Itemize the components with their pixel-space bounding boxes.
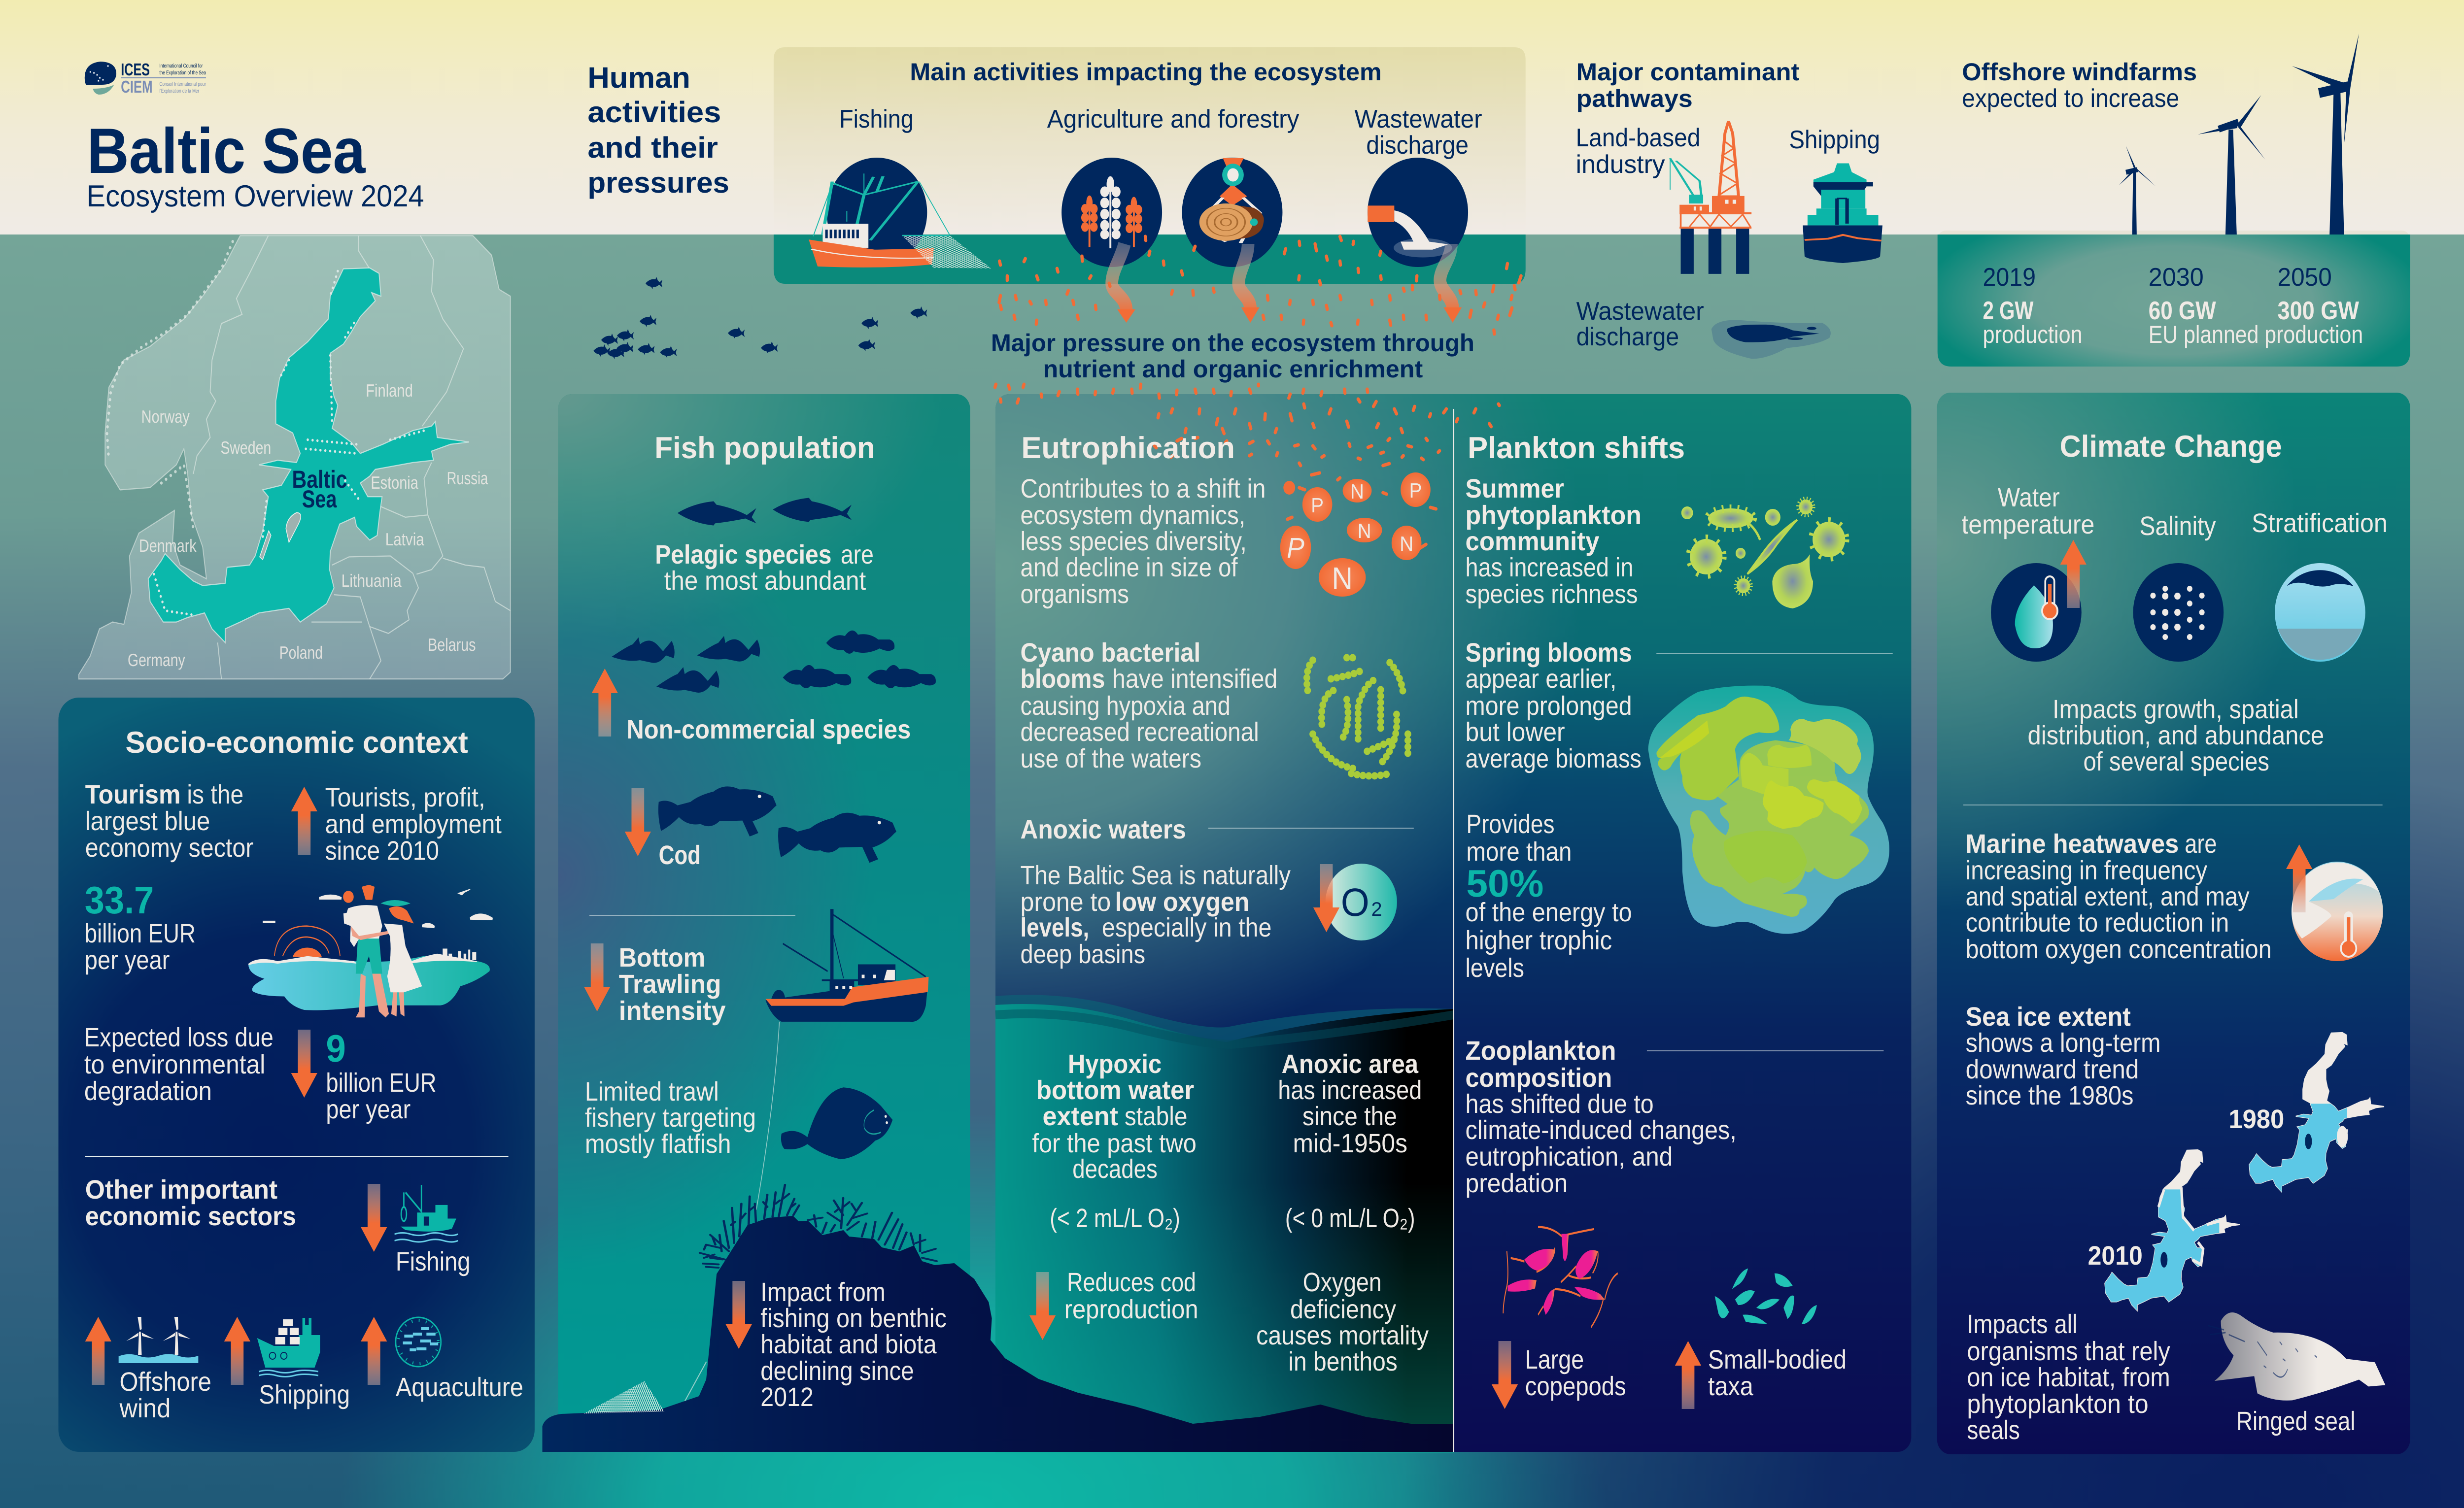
icon: water temperature: [1991, 540, 2087, 662]
panel: main activities impacting the ecosystem: [774, 47, 1526, 284]
text: low oxygen levels: especially in the: [1102, 913, 1271, 942]
heading: Fish population: [654, 431, 875, 465]
ICES CIEM logo: CIEM: [121, 77, 153, 97]
label: non-commercial species: Non-commercial species: [626, 715, 911, 744]
text: tourists increase: since 2010: [325, 836, 439, 866]
text: spring blooms: but lower: [1466, 717, 1565, 747]
text: bottom trawling intensity: [619, 943, 726, 1026]
text: marine heatwaves: and spatial extent, and may: [1966, 882, 2250, 911]
text: reduces cod reproduction: Reduces cod: [1067, 1268, 1196, 1297]
icon: cyanobacteria chains: [1307, 658, 1408, 776]
text: impact from fishing on benthic habitat: fishing on benthic: [760, 1304, 947, 1333]
map of the Baltic region: Finland: [366, 380, 413, 401]
label: cod: Cod: [659, 840, 701, 870]
years: 2030: [2149, 263, 2204, 292]
text: spring blooms: [1466, 638, 1642, 773]
production notes: EU planned production: [2149, 321, 2363, 348]
arrow down: [291, 1030, 317, 1098]
text: low oxygen levels: levels,: [1021, 913, 1089, 942]
text: cyanobacterial blooms: [1021, 638, 1277, 773]
map: sea ice 2010: [2105, 1150, 2240, 1310]
text: hypoxic bottom water: extent: [1043, 1102, 1118, 1131]
number: 33.7 billion EUR: [85, 878, 196, 975]
arrow down fishing: [361, 1184, 387, 1252]
label: shipping: Shipping: [259, 1380, 350, 1409]
text: zooplankton composition: Zooplankton: [1466, 1036, 1616, 1066]
map of the Baltic region: Norway: [141, 406, 190, 427]
icon: pelagic fish: [678, 498, 852, 526]
arrow down cod reproduction: [1029, 1272, 1056, 1340]
heading: offshore windfarms: Offshore windfarms: [1962, 58, 2197, 86]
icon: phytoplankton: [1681, 500, 1845, 608]
label: stratification: Stratification: [2252, 508, 2388, 538]
text: limited trawl fishery: [585, 1077, 756, 1159]
ICES CIEM logo: l'Exploration de la Mer: [159, 88, 199, 94]
title: Baltic Sea: [87, 115, 366, 187]
heading: human activities and their pressures: and their: [587, 131, 718, 164]
heading: Climate Change: [2060, 430, 2282, 464]
label: ringed seal: Ringed seal: [2236, 1407, 2356, 1436]
heading: human activities and their pressures: activities: [587, 96, 721, 129]
years: 2019: [1983, 263, 2036, 292]
text: oxygen deficiency: in benthos: [1288, 1347, 1398, 1376]
heading: human activities and their pressures: [587, 61, 729, 199]
icon: flatfish: [781, 1087, 892, 1159]
arrow up shipping: [224, 1317, 250, 1385]
map of the Baltic region: Denmark: [139, 536, 197, 556]
arrow down benthic: [726, 1281, 752, 1349]
text: tourism: largest blue: [85, 806, 210, 836]
text: summer phytoplankton: species richness: [1466, 579, 1638, 609]
text: marine heatwaves: [1966, 829, 2272, 964]
text: oxygen deficiency: deficiency: [1290, 1295, 1396, 1324]
heading: major pressure on the ecosystem: Major pressure on the ecosystem through: [991, 329, 1474, 357]
text: impacts all organisms: seals: [1967, 1415, 2020, 1445]
text: eutrophication effects: less species diversity,: [1021, 527, 1247, 556]
map of the Baltic region: Poland: [279, 642, 323, 663]
text: marine heatwaves: contribute to reduction in: [1966, 908, 2229, 938]
text: bottom trawling intensity: Bottom: [619, 943, 705, 972]
text: low oxygen levels: deep basins: [1021, 939, 1145, 969]
text: sea ice extent: since the 1980s: [1966, 1081, 2133, 1110]
title: Ecosystem Overview 2024: [86, 179, 424, 213]
text: marine heatwaves: Marine heatwaves: [1966, 829, 2179, 859]
map of the Baltic region: Lithuania: [342, 570, 402, 591]
icon: fishing circle and trawler: [809, 158, 991, 268]
text: anoxic area: [1278, 1049, 1422, 1233]
label: water temperature: [1961, 483, 2094, 539]
text: sea ice extent: [1966, 1002, 2161, 1110]
section: eutrophication: [1021, 431, 1431, 1376]
production notes: production: [1983, 321, 2083, 348]
map of the Baltic region: Estonia: [371, 472, 419, 493]
text: 50 percent energy: levels: [1466, 953, 1524, 983]
icon: oxygen O2: 2: [1371, 899, 1382, 920]
label: salinity: Salinity: [2139, 511, 2216, 541]
heading: major contaminant pathways: Major contaminant: [1576, 58, 1800, 86]
text: expected loss: to environmental: [84, 1050, 265, 1079]
text: impacts growth: of several species: [2083, 747, 2269, 776]
label: aquaculture: Aquaculture: [396, 1373, 523, 1402]
arrows: nutrient flows from activities to the sea: [1112, 244, 1462, 323]
icon: cod: [658, 786, 896, 863]
text: 50 percent energy: of the energy to: [1466, 898, 1632, 927]
arrow up aquaculture: [361, 1317, 387, 1385]
label: wastewater discharge: [1354, 105, 1482, 160]
text: hypoxic bottom water: Hypoxic: [1068, 1049, 1162, 1079]
number: 33.7 billion EUR: per year: [85, 945, 170, 975]
label: wastewater discharge: discharge: [1366, 131, 1469, 160]
label: agriculture and forestry: Agriculture and forestry: [1047, 105, 1299, 134]
gigawatts: [1983, 297, 2360, 325]
gigawatts: 300 GW: [2278, 297, 2360, 325]
label: fishing: Fishing: [839, 105, 914, 134]
number: 33.7 billion EUR: billion EUR: [85, 919, 196, 948]
label: offshore wind: [119, 1367, 211, 1423]
icon: oxygen O2: [1313, 864, 1397, 940]
heading: human activities and their pressures: pressures: [587, 166, 729, 199]
text: hypoxic bottom water: for the past two: [1032, 1129, 1197, 1158]
text: impacts all organisms: on ice habitat, from: [1967, 1363, 2170, 1392]
map of the Baltic region: Belarus: [428, 635, 476, 655]
heading: human activities and their pressures: Human: [587, 61, 690, 94]
orange nutrient particles: [995, 236, 1521, 553]
text: hypoxic bottom water: [1032, 1049, 1197, 1233]
section: plankton shifts: [1466, 431, 1893, 1409]
heading: offshore windfarms: [1962, 58, 2197, 113]
label: wastewater discharge pathway: [1576, 297, 1704, 351]
text: hypoxic bottom water: stable: [1125, 1102, 1188, 1131]
illustration: ringed seal: [2208, 1312, 2385, 1401]
number: 33.7 billion EUR: 33.7: [85, 878, 154, 922]
text: impacts growth: Impacts growth, spatial: [2053, 695, 2299, 724]
panel: socio-economic context: [59, 698, 535, 1452]
text: spring blooms: appear earlier,: [1466, 664, 1616, 694]
text: 50 percent energy: more than: [1466, 837, 1572, 867]
production notes: [1983, 321, 2363, 348]
icon: cargo ship: [257, 1318, 320, 1376]
label: small-bodied taxa: [1708, 1345, 1847, 1401]
map of the Baltic region: Russia: [447, 468, 488, 488]
number: 9 billion EUR: 9: [326, 1027, 346, 1070]
text: zooplankton composition: eutrophication, and: [1466, 1142, 1673, 1172]
text: summer phytoplankton: Summer: [1466, 474, 1564, 503]
icon: oil rig: [1670, 121, 1751, 274]
label: large copepods: copepods: [1525, 1372, 1626, 1401]
title: [86, 115, 424, 213]
text: anoxic area: since the: [1302, 1102, 1397, 1131]
map of the Baltic region: Germany: [128, 650, 185, 670]
heading: main activities: Main activities impacting the ecosystem: [910, 58, 1382, 86]
ICES CIEM logo: [85, 60, 206, 97]
number: 9 billion EUR: [326, 1027, 437, 1124]
icon: forestry log: [1182, 158, 1282, 267]
arrow up: [291, 787, 317, 855]
ICES CIEM logo: the Exploration of the Sea: [159, 70, 206, 76]
text: eutrophication effects: [1021, 474, 1266, 609]
text: reduces cod reproduction: [1064, 1268, 1198, 1324]
text: impacts growth: [2027, 695, 2324, 776]
label: wastewater discharge pathway: Wastewater: [1576, 297, 1704, 326]
label: 1980: 1980: [2228, 1105, 2284, 1134]
text: zooplankton composition: [1466, 1036, 1737, 1198]
arrow down cod: [625, 788, 651, 856]
text: cyanobacterial blooms: Cyano bacterial: [1021, 638, 1200, 668]
text: cyanobacterial blooms: use of the waters: [1021, 744, 1201, 773]
text: impact from fishing on benthic habitat: [760, 1277, 947, 1412]
text: impacts growth: distribution, and abundance: [2027, 721, 2324, 750]
text: marine heatwaves: are: [2185, 829, 2217, 859]
text: oxygen deficiency: [1256, 1268, 1429, 1376]
panel: eutrophication and plankton shifts: [995, 394, 1911, 1453]
map of the Baltic region: Sweden: [220, 437, 271, 458]
text: pelagic species: Pelagic species: [655, 540, 831, 570]
text: tourism: [85, 780, 253, 863]
text: 50 percent energy: Provides: [1466, 809, 1555, 839]
label: fishing: Fishing: [396, 1247, 470, 1276]
label: small-bodied taxa: taxa: [1708, 1372, 1754, 1401]
label: wastewater discharge pathway: discharge: [1576, 323, 1679, 351]
text: tourism: Tourism: [85, 780, 181, 809]
icon: offshore wind turbines: [119, 1317, 198, 1363]
ICES CIEM logo: Conseil International pour: [159, 81, 206, 87]
heading: major contaminant pathways: pathways: [1576, 85, 1693, 112]
text: eutrophication effects: ecosystem dynamics,: [1021, 501, 1245, 530]
text: eutrophication effects: and decline in size of: [1021, 553, 1238, 582]
ICES CIEM logo: ICES: [121, 60, 150, 79]
text: sea ice extent: shows a long-term: [1966, 1028, 2161, 1058]
years: [1983, 263, 2332, 292]
map of the Baltic region: Latvia: [385, 529, 425, 549]
icon: nutrient bubbles P and N: N: [1350, 480, 1364, 503]
icon: nutrient bubbles P and N: [1280, 472, 1431, 597]
gigawatts: 2 GW: [1983, 297, 2034, 325]
text: anoxic area: has increased: [1278, 1075, 1422, 1105]
arrow up small-bodied taxa: [1675, 1341, 1701, 1409]
text: low oxygen levels: prone to: [1021, 887, 1111, 917]
text: impact from fishing on benthic habitat: 2012: [760, 1382, 814, 1412]
text: oxygen deficiency: causes mortality: [1256, 1321, 1429, 1350]
text: tourists increase: and employment: [325, 809, 502, 839]
text: tourists increase: [325, 783, 502, 866]
icon: cargo ship: [1803, 164, 1882, 263]
text: zooplankton composition: has shifted due to: [1466, 1089, 1654, 1119]
text: reduces cod reproduction: reproduction: [1064, 1295, 1198, 1324]
text: bottom trawling intensity: intensity: [619, 996, 726, 1026]
icon: large copepods: [1503, 1227, 1618, 1327]
text: spring blooms: more prolonged: [1466, 691, 1632, 721]
panel: offshore wind production: [1938, 231, 2410, 367]
gigawatts: 60 GW: [2149, 297, 2216, 325]
text: limited trawl fishery: Limited trawl: [585, 1077, 719, 1106]
label: shipping: Shipping: [1789, 126, 1880, 154]
text: impacts all organisms: [1967, 1309, 2170, 1445]
seabed with corals and net: [542, 1185, 1454, 1452]
text: other important economic sectors: Other important: [85, 1175, 277, 1205]
label: offshore wind: Offshore: [120, 1367, 211, 1397]
panel: climate change: [1937, 393, 2410, 1454]
text: summer phytoplankton: phytoplankton: [1466, 501, 1642, 530]
text: low oxygen levels: The Baltic Sea is naturally: [1021, 861, 1291, 890]
text: zooplankton composition: climate-induced changes,: [1466, 1115, 1737, 1145]
text: impact from fishing on benthic habitat: Impact from: [760, 1277, 886, 1307]
icon: nutrient bubbles P and N: N: [1400, 532, 1413, 555]
text: impact from fishing on benthic habitat: habitat and biota: [760, 1330, 937, 1359]
text: impact from fishing on benthic habitat: declining since: [760, 1356, 914, 1386]
deep anoxic water layers: [995, 995, 1454, 1453]
icon: fishing boat: [395, 1185, 458, 1242]
text: low oxygen levels: [1021, 861, 1291, 969]
years: 2050: [2278, 263, 2332, 292]
text: limited trawl fishery: fishery targeting: [585, 1103, 756, 1133]
text: bottom trawling intensity: Trawling: [619, 970, 721, 999]
icon: agriculture wheat: [1061, 158, 1162, 267]
text: zooplankton composition: predation: [1466, 1169, 1568, 1198]
text: 50 percent energy: 50%: [1466, 862, 1543, 905]
map of the Baltic region: [79, 235, 511, 679]
text: summer phytoplankton: [1466, 474, 1642, 609]
text: zooplankton composition: composition: [1466, 1063, 1612, 1093]
heading: major pressure on the ecosystem: nutrient and organic enrichment: [1043, 355, 1423, 383]
text: impacts all organisms: phytoplankton to: [1967, 1389, 2149, 1419]
illustration: family on beach: [248, 885, 492, 1017]
label: small-bodied taxa: Small-bodied: [1708, 1345, 1847, 1374]
text: spring blooms: Spring blooms: [1466, 638, 1632, 668]
icon: aquaculture: [396, 1317, 441, 1367]
label: large copepods: Large: [1525, 1345, 1584, 1374]
label: water temperature: Water: [1998, 483, 2060, 512]
text: impacts all organisms: organisms that rely: [1967, 1337, 2170, 1366]
icon: wastewater pipe: [1368, 158, 1468, 267]
text: hypoxic bottom water: (< 2 mL/L O₂): [1050, 1204, 1180, 1233]
text: low oxygen levels: low oxygen: [1115, 887, 1249, 917]
text: cyanobacterial blooms: blooms: [1021, 664, 1105, 694]
arrow down copepods: [1492, 1341, 1518, 1409]
label: wastewater discharge: Wastewater: [1354, 105, 1482, 134]
text: other important economic sectors: [85, 1175, 296, 1231]
ICES CIEM logo: International Council for: [159, 63, 203, 69]
text: limited trawl fishery: mostly flatfish: [585, 1129, 731, 1159]
heading: Eutrophication: [1021, 431, 1235, 465]
label: large copepods: [1525, 1345, 1626, 1401]
arrow down trawling: [584, 943, 610, 1011]
icon: non-commercial fish: [612, 631, 936, 693]
text: tourism: is the: [187, 780, 243, 809]
heading: major pressure on the ecosystem: [991, 329, 1474, 383]
arrow up offshore wind: [85, 1317, 111, 1385]
text: anoxic area: (< 0 mL/L O₂): [1285, 1204, 1415, 1233]
text: cyanobacterial blooms: have intensified: [1112, 664, 1277, 694]
number: 9 billion EUR: per year: [326, 1095, 411, 1124]
icon: nutrient bubbles P and N: P: [1409, 479, 1422, 502]
label: land-based industry: industry: [1576, 150, 1665, 179]
map: sea ice 1980: [2249, 1033, 2384, 1192]
icon: heatwave: [2286, 844, 2383, 961]
text: pelagic species: are: [841, 540, 874, 570]
text: expected loss: [84, 1023, 274, 1106]
icon: trawler boat: [682, 909, 928, 1407]
label: water temperature: temperature: [1961, 510, 2094, 539]
label: offshore wind: wind: [119, 1394, 171, 1423]
text: other important economic sectors: economic sectors: [85, 1202, 296, 1231]
text: sea ice extent: downward trend: [1966, 1055, 2139, 1084]
icon: nutrient bubbles P and N: P: [1311, 494, 1324, 517]
icon: nutrient bubbles P and N: N: [1358, 519, 1371, 542]
heading: offshore windfarms: expected to increase: [1962, 84, 2179, 113]
map of the Baltic region: Sea: [302, 485, 337, 513]
text: summer phytoplankton: has increased in: [1466, 553, 1633, 582]
text: tourists increase: Tourists, profit,: [325, 783, 485, 812]
text: tourism: economy sector: [85, 833, 253, 863]
number: 9 billion EUR: billion EUR: [326, 1068, 437, 1098]
icon: oil spill: [1711, 320, 1831, 359]
text: hypoxic bottom water: decades: [1072, 1154, 1158, 1184]
text: marine heatwaves: bottom oxygen concentration: [1966, 935, 2272, 964]
heading: Socio-economic context: [125, 726, 468, 760]
heading: major contaminant pathways: [1576, 58, 1800, 112]
label: land-based industry: Land-based: [1576, 124, 1700, 152]
text: anoxic area: Anoxic area: [1282, 1049, 1419, 1079]
text: hypoxic bottom water: bottom water: [1036, 1075, 1194, 1105]
text: cyanobacterial blooms: causing hypoxia and: [1021, 691, 1231, 721]
icon: stratification: [2275, 563, 2365, 662]
map of the Baltic region: Baltic: [292, 466, 347, 493]
text: pelagic species: the most abundant: [664, 566, 866, 596]
label: land-based industry: [1576, 124, 1700, 179]
arrow up non-commercial: [592, 669, 618, 737]
icon: oxygen O2: O: [1341, 880, 1369, 924]
text: sea ice extent: Sea ice extent: [1966, 1002, 2131, 1032]
text: marine heatwaves: increasing in frequency: [1966, 856, 2207, 885]
text: cyanobacterial blooms: decreased recreational: [1021, 717, 1259, 747]
shoal of small fish: [593, 277, 927, 359]
icon: salinity: [2133, 563, 2224, 662]
heading: anoxic waters: Anoxic waters: [1021, 815, 1186, 844]
text: summer phytoplankton: community: [1466, 527, 1599, 556]
panel: fish population: [558, 394, 970, 1452]
text: eutrophication effects: organisms: [1021, 579, 1129, 609]
text: 50 percent energy: higher trophic: [1466, 926, 1612, 955]
icon: nutrient bubbles P and N: N: [1332, 561, 1353, 596]
text: 50 percent energy: [1466, 809, 1632, 983]
icon: nutrient bubbles P and N: P: [1287, 532, 1304, 564]
text: expected loss: Expected loss due: [84, 1023, 274, 1052]
text: eutrophication effects: Contributes to a shift in: [1021, 474, 1266, 503]
text: spring blooms: average biomass: [1466, 744, 1642, 773]
text: pelagic species: [655, 540, 874, 596]
heading: Plankton shifts: [1468, 431, 1685, 465]
illustration: spring bloom: [1648, 686, 1889, 934]
text: expected loss: degradation: [84, 1076, 212, 1106]
icon: three wind turbines: [2119, 34, 2359, 235]
label: 2010: 2010: [2088, 1241, 2143, 1271]
icon: small-bodied taxa: [1715, 1269, 1817, 1324]
text: anoxic area: mid-1950s: [1293, 1129, 1407, 1158]
text: oxygen deficiency: Oxygen: [1303, 1268, 1382, 1297]
text: impacts all organisms: Impacts all: [1967, 1309, 2078, 1339]
